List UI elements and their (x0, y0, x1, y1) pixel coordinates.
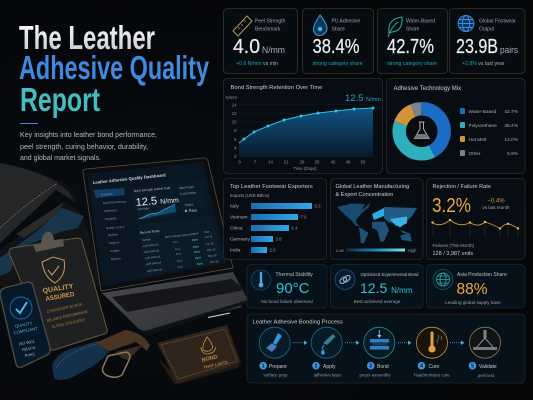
panel: asia production share (426, 264, 525, 308)
dashboard on laptop screen: Insights (110, 248, 120, 253)
bars: 2.9 (270, 248, 276, 252)
clipboard: quality assured: GLOBAL STANDARDS (51, 318, 86, 329)
step 4: cure (414, 327, 450, 378)
legend: 42.7% (504, 109, 519, 115)
line chart: 14 (232, 102, 237, 108)
phone: quality compliant: COMPLIANT (13, 326, 39, 335)
line chart: 49 (346, 160, 351, 164)
leather swatches (0, 163, 100, 300)
panel: water-based share: 42.7% (387, 36, 434, 58)
bars: India (230, 248, 241, 254)
panel: global footwear output: +2.8% vs last year (462, 61, 505, 67)
dashboard on laptop screen: 12.1 (177, 258, 183, 263)
line chart: 56 (361, 160, 366, 164)
legend: 5.9% (507, 151, 519, 157)
panel: water-based share: Share (406, 26, 420, 32)
dashboard on laptop screen: Reports (111, 256, 121, 261)
heading: Top Leather Footwear Exporters (230, 184, 313, 190)
panel: peel strength benchmark: Benchmark (255, 26, 281, 32)
bars (230, 203, 321, 254)
icon: gold shield (42, 257, 65, 283)
sparkline (431, 219, 519, 237)
clipboard: quality assured: RELIABLE PERFORMANCE (46, 310, 89, 323)
bars: 3.8 (276, 236, 282, 242)
step 3: bond: 3 (369, 364, 372, 370)
clipboard: quality assured: CONSISTENT BONDS (46, 302, 83, 314)
step 3: bond (360, 327, 395, 378)
leather keychain (52, 330, 150, 380)
arrow (398, 340, 412, 345)
panel: PU adhesive share: Share (332, 26, 345, 32)
step 2: apply: Apply (323, 364, 336, 370)
panel: optimized experimental bond (330, 264, 423, 308)
dashboard on laptop screen: Result (191, 231, 199, 236)
title (19, 19, 209, 118)
panel: peel strength benchmark: Peel Strength (255, 18, 286, 24)
panel: bonding process (247, 314, 525, 383)
dashboard on laptop screen: Pass (193, 244, 200, 249)
arrow (292, 340, 308, 345)
chart value: 12.5 N/mm (345, 93, 381, 104)
line chart: 14 (268, 160, 273, 164)
icon: ruler (233, 16, 252, 36)
dashboard on laptop screen: Bond Performance (103, 199, 127, 205)
phone: quality compliant: RoHS (24, 352, 36, 358)
bars: China (230, 226, 243, 232)
panel: optimized experimental bond: Best achieved average (354, 299, 401, 304)
panel: rejection failure rate: 128 / 3,987 units (432, 251, 473, 257)
dashboard on laptop screen: 12.2 (175, 246, 181, 251)
panel: thermal stability (247, 264, 327, 308)
panel: top exporters bar chart: Exports (USD Billion) (230, 193, 270, 198)
line chart: N/mm (226, 95, 237, 100)
line chart: 28 (300, 160, 305, 164)
bars: Italy (230, 204, 239, 210)
bars: 9.3 (314, 204, 321, 208)
dashboard on laptop screen: Jun 01 (206, 241, 214, 246)
panel: peel strength benchmark (224, 8, 298, 74)
heading: Rejection / Failure Rate (432, 184, 491, 190)
panel: thermal stability: No bond failure observed (261, 299, 313, 304)
step 1: prepare: 1 (262, 364, 265, 370)
map legend: Low (336, 248, 345, 253)
line chart: 35 (315, 160, 320, 164)
panel: peel strength benchmark: 4.0 (233, 36, 260, 58)
dashboard on laptop screen: 12.5 N/mm (135, 193, 179, 209)
dashboard on laptop screen: Bond Strength (Latest Test) (134, 186, 170, 193)
bars: 6.4 (292, 226, 298, 230)
laptop (83, 158, 248, 335)
leather tag: bond that lasts: THAT LASTS (203, 359, 229, 370)
line chart (226, 95, 374, 171)
world map (337, 203, 417, 244)
step 5: validate: peel test (478, 373, 495, 378)
line chart: 4 (234, 146, 237, 150)
clipboard: quality assured: QUALITY (42, 283, 74, 295)
bars: Vietnam (230, 214, 248, 220)
step 5: validate (469, 327, 500, 378)
dashboard on laptop screen: Regions (109, 240, 120, 245)
step 5: validate: Validate (479, 364, 497, 370)
panel: asia production share: Leading global supply base (445, 300, 501, 305)
dashboard on laptop screen: Average (138, 206, 149, 211)
dashboard on laptop screen: LAB-2405-04 (146, 260, 162, 266)
step 5: validate: 5 (471, 364, 474, 370)
leather tag: bond that lasts (157, 325, 241, 385)
dashboard on laptop screen: Jun 01 (205, 234, 213, 239)
icon: globe (458, 16, 474, 32)
line chart: 0 (238, 160, 241, 164)
line chart: 21 (284, 160, 289, 164)
dashboard on laptop screen: Status (185, 202, 194, 207)
step 3: bond: Bond (377, 364, 389, 370)
icon: droplet (313, 15, 327, 36)
panel: global footwear output: Output (479, 26, 495, 32)
line chart: 7 (254, 160, 257, 164)
icon: thermometer (251, 270, 271, 290)
dashboard on laptop screen: Markets (108, 232, 119, 237)
panel: peel strength benchmark: N/mm (262, 45, 285, 55)
panel: adhesive technology mix (386, 78, 525, 174)
dashboard on laptop screen: Date (204, 229, 210, 234)
panel: rejection failure rate: vs last month (482, 205, 510, 210)
panel: rejection failure rate (426, 178, 525, 260)
phone: quality compliant: QUALITY (14, 320, 33, 329)
intro text: Key insights into leather bond performance, (20, 130, 157, 139)
dashboard on laptop screen: Pass (189, 208, 197, 213)
dashboard on laptop screen: 11.8 (176, 251, 181, 256)
panel: thermal stability: 90°C (276, 280, 310, 297)
legend: 38.4% (504, 123, 519, 129)
dashboard on laptop screen: Quality Control (106, 225, 125, 230)
legend (460, 108, 519, 157)
heading: Global Leather Manufacturing (336, 184, 409, 190)
panel: asia production share: 88% (456, 281, 488, 298)
panel: global manufacturing map (330, 178, 423, 260)
panel: bond strength line chart (224, 78, 382, 174)
panel: PU adhesive share (302, 8, 374, 74)
step 4: cure: heat/moisture cure (414, 372, 450, 378)
line chart: 42 (331, 160, 336, 164)
intro text (20, 130, 157, 162)
panel: global footwear output (450, 8, 525, 74)
phone: quality compliant: ISO 9001 (19, 340, 35, 346)
heading: Leather Adhesive Bonding Process (252, 320, 343, 326)
step 2: apply: adhesive layer (314, 372, 342, 378)
panel: water-based share (378, 8, 448, 74)
step 4: cure: 4 (420, 364, 423, 370)
panel: PU adhesive share: PU Adhesive (332, 18, 360, 24)
phone: quality compliant: REACH (22, 346, 36, 352)
dashboard on laptop screen: Pass (194, 249, 201, 254)
dashboard on laptop screen: LAB-2405-05 (147, 267, 163, 273)
panel: global footwear output: 23.9B (456, 36, 498, 58)
clipboard: quality assured: ASSURED (45, 291, 75, 303)
dashboard on laptop screen: May 30 (208, 253, 217, 258)
arrow (345, 340, 360, 345)
intro text: peel strength, curing behavior, durability, (20, 142, 148, 151)
map legend: High (408, 248, 417, 253)
dashboard on laptop screen: May 31 (207, 247, 216, 252)
step 1: prepare: surface prep (264, 372, 288, 378)
legend: Hot Melt (468, 137, 487, 143)
dashboard on laptop screen: LAB-2405-03 (145, 254, 161, 260)
dashboard on laptop screen: ≥ 10.0 N/mm (180, 191, 197, 196)
line chart: 12 (232, 111, 237, 116)
heading: Adhesive Technology Mix (394, 86, 461, 92)
line chart: 2 (234, 154, 237, 159)
step 4: cure: Cure (428, 364, 440, 370)
legend: 13.0% (504, 137, 519, 143)
panel: rejection failure rate: −0.4% (487, 198, 505, 204)
panel: PU adhesive share: strong category share (312, 61, 363, 67)
dashboard on laptop screen: Durability (105, 216, 117, 221)
bars: 7.6 (300, 214, 307, 220)
line chart: 10 (232, 120, 237, 124)
panel: global footwear output: Global Footwear (479, 18, 516, 24)
legend: Polyurethane (468, 123, 497, 129)
title: Adhesive Quality (19, 49, 209, 86)
panel: water-based share: Water-Based (406, 18, 435, 24)
map legend (336, 248, 417, 253)
dashboard on laptop screen: Leather Adhesive Quality Dashboard (93, 172, 166, 185)
dashboard on laptop screen: Adhesives (104, 208, 118, 213)
panel: rejection failure rate: Failures (This Month) (432, 243, 475, 248)
step 2: apply: 2 (315, 364, 318, 370)
panel: optimized experimental bond: Optimized Experimental Bond (360, 272, 419, 278)
dashboard on laptop screen (93, 172, 224, 276)
legend: Other (468, 151, 481, 157)
line chart: Time (Days) (293, 166, 317, 171)
panel: asia production share: Asia Production Share (457, 272, 507, 278)
legend: Water-Based (468, 109, 497, 115)
heading: Bond Strength Retention Over Time (230, 85, 322, 91)
panel: rejection failure rate: 3.2% (432, 195, 471, 217)
dashboard on laptop screen: 12.4 (178, 264, 184, 269)
phone: quality compliant (0, 282, 50, 368)
intro text: and global market signals. (20, 153, 101, 162)
clipboard: quality assured (9, 232, 107, 350)
dashboard on laptop screen: Pass (192, 237, 199, 242)
line chart: 6 (234, 137, 237, 142)
dashboard on laptop screen: LAB-2405-01 (143, 242, 159, 248)
leather tag: bond that lasts: BOND (201, 354, 218, 364)
icon: chain link (335, 270, 355, 290)
panel: global footwear output: pairs (500, 45, 518, 55)
dashboard on laptop screen: Bond Strength (N/mm) (165, 232, 191, 239)
title: The Leather (19, 19, 155, 56)
step 1: prepare: Prepare (269, 364, 287, 370)
icon: drop (201, 337, 216, 354)
step 2: apply (311, 327, 342, 378)
panel: water-based share: strong category share (387, 61, 437, 67)
icon: teal globe (433, 270, 453, 290)
dashboard on laptop screen: Overview (101, 192, 114, 196)
bars: Germany (230, 236, 250, 242)
arrow (450, 340, 464, 345)
dashboard on laptop screen: Pass (197, 261, 204, 266)
dashboard on laptop screen: Sample (142, 237, 151, 242)
step 1: prepare (259, 327, 290, 378)
step 3: bond: press assembly (360, 372, 391, 378)
panel: optimized experimental bond: 12.5 N/mm (360, 280, 413, 296)
dashboard on laptop screen: Recent Tests (140, 229, 160, 235)
dashboard on laptop screen: 12.5 (173, 239, 179, 244)
dashboard on laptop screen: Spec/Target (179, 185, 194, 190)
line chart: 8 (234, 128, 237, 133)
panel: thermal stability: Thermal Stability (276, 272, 313, 278)
dashboard on laptop screen: LAB-2405-02 (144, 248, 160, 254)
icon: flask (406, 116, 437, 147)
panel: peel strength benchmark: +0.6 N/mm vs min (236, 61, 278, 67)
panel: top exporters bar chart (224, 178, 326, 260)
panel: global manufacturing map: & Export Concentration (336, 192, 393, 198)
title: Report (20, 81, 100, 118)
panel: PU adhesive share: 38.4% (312, 36, 360, 58)
donut chart (399, 109, 444, 154)
dashboard on laptop screen: Pass (195, 255, 202, 260)
dashboard on laptop screen: May 29 (210, 259, 219, 264)
icon: leaf (388, 17, 402, 37)
